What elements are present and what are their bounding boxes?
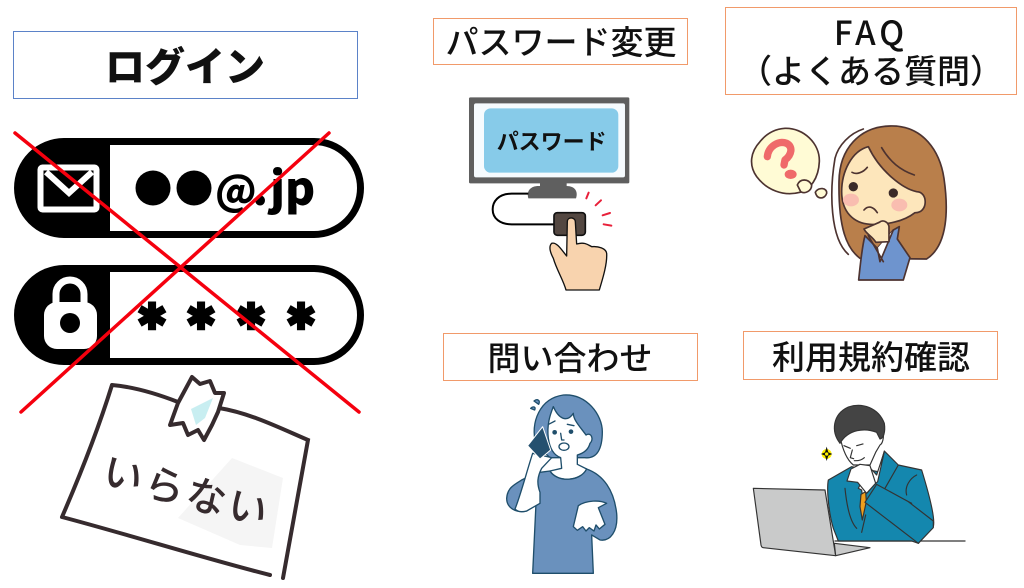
- hand pressing: [550, 218, 607, 290]
- laptop base: [834, 543, 870, 556]
- illustration: woman on phone: [507, 395, 617, 573]
- desk line: [835, 539, 965, 543]
- monitor: [469, 97, 629, 198]
- email placeholder text: [136, 153, 315, 219]
- necktie: [860, 492, 866, 520]
- hand on chin: [847, 464, 876, 493]
- jacket lapels and creases: [845, 465, 917, 532]
- red cross-out: [15, 133, 359, 412]
- blazer sleeve line and collar: [868, 230, 893, 262]
- torso and sleeves: [507, 469, 617, 573]
- illustration: puzzled woman with question bubble: [752, 126, 946, 280]
- heading: login: [14, 32, 358, 98]
- forearm: [515, 453, 552, 512]
- hair: [534, 395, 602, 458]
- blazer: [859, 227, 910, 280]
- outer hair outline: [832, 129, 863, 254]
- password asterisks: [137, 297, 316, 338]
- heading: FAQ: （よくある質問）: [739, 45, 1003, 93]
- jacket sleeve: [865, 484, 933, 543]
- pencil shading: [178, 458, 283, 548]
- password asterisks: ✱: [236, 297, 266, 338]
- illustration: password monitor and button: [469, 97, 629, 290]
- open hand: [573, 501, 607, 531]
- face and neck: [548, 407, 592, 479]
- note text: いらない: [97, 439, 278, 539]
- fringe line: [882, 148, 914, 175]
- cable: [493, 194, 555, 224]
- hair: [834, 405, 885, 443]
- email placeholder text: @: [215, 159, 257, 217]
- shirt: [858, 452, 884, 495]
- email placeholder text: .jp: [252, 153, 315, 219]
- heading: contact: [444, 332, 698, 380]
- tape tint: [191, 398, 213, 425]
- password asterisks: ✱: [137, 297, 167, 338]
- face: [840, 429, 883, 465]
- heading: FAQ: FAQ: [834, 7, 908, 55]
- facial features: [843, 167, 907, 213]
- heading: login: ログイン: [105, 35, 265, 93]
- laptop: [753, 488, 836, 556]
- icon: torn tape: [170, 377, 224, 440]
- password asterisks: ✱: [286, 297, 316, 338]
- button: [554, 213, 585, 235]
- icon: smartphone: [528, 427, 551, 459]
- password input pill: [14, 265, 360, 365]
- heading: terms of use: 利用規約確認: [772, 331, 970, 379]
- icon: envelope panel: [14, 138, 110, 238]
- hand on chin: [864, 221, 889, 242]
- hair: [839, 126, 946, 259]
- facial features: [549, 421, 574, 450]
- jacket: [828, 451, 934, 543]
- monitor: パスワード: [497, 124, 607, 156]
- heading: contact: 問い合わせ: [488, 332, 652, 380]
- hand-drawn note: not needed: [62, 377, 308, 578]
- illustration: man reading at laptop: [753, 405, 965, 556]
- press ticks: [586, 193, 611, 226]
- facial features: [844, 444, 864, 461]
- face: [842, 147, 925, 224]
- password asterisks: ✱: [186, 297, 216, 338]
- thought bubble: [752, 128, 827, 198]
- email input pill: [14, 138, 360, 238]
- heading: FAQ: [726, 7, 1016, 94]
- heading: change password: パスワード変更: [446, 16, 676, 64]
- icon: padlock panel: [14, 265, 110, 365]
- worry marks: [531, 400, 539, 410]
- sparkle icon: [821, 447, 832, 461]
